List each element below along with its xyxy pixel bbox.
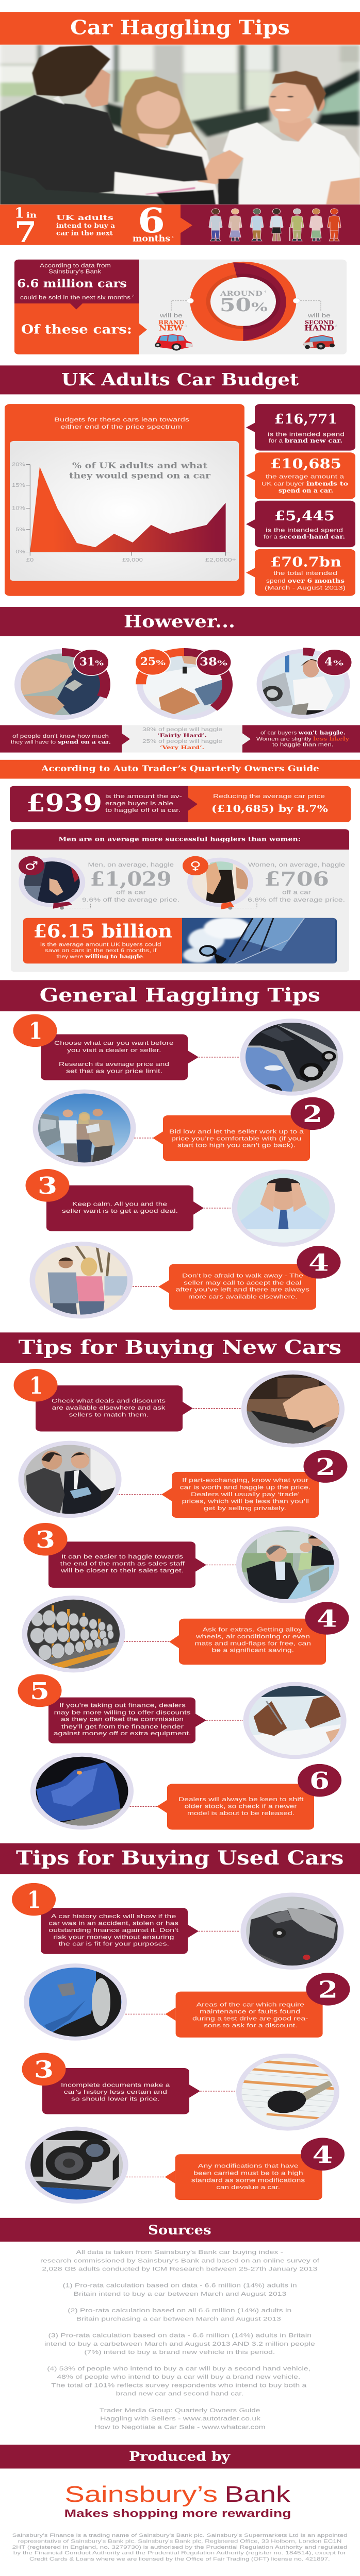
heading: However bbox=[0, 607, 360, 636]
new car tip 3: It can be easier to haggle towards bbox=[61, 1553, 183, 1560]
used car tip 4 bbox=[25, 2127, 345, 2204]
photo: scratched blue car bbox=[24, 1963, 127, 2041]
photo: car key on documents bbox=[236, 2054, 339, 2131]
new car tip 4: 4 bbox=[317, 1605, 337, 1632]
area chart: percent of UK adults by spend: 0% bbox=[15, 550, 25, 555]
callout: 6.15 billion bbox=[23, 918, 337, 964]
new car tip 5: against money off or extra equipment. bbox=[54, 1730, 191, 1737]
stat box: average intended spend: spend on a car. bbox=[279, 488, 333, 494]
photo ring: credit card 31 percent: % bbox=[95, 659, 104, 667]
new car tip 5 bbox=[18, 1674, 347, 1759]
female photo ring and badge bbox=[187, 858, 253, 909]
caption row: of car buyers won't haggle. bbox=[260, 730, 346, 736]
photo: row of cars bbox=[240, 1019, 343, 1101]
panel: 939 pound haggle: to haggle off of a car. bbox=[105, 807, 181, 814]
caption row: ‘Fairly Hard’. bbox=[157, 732, 207, 738]
area chart: percent of UK adults by spend: £2,0000+ bbox=[205, 558, 236, 563]
photo ring: keys and handshake 25 and 38 percent: % bbox=[156, 658, 166, 667]
title band bbox=[0, 12, 360, 45]
new car tip 2: car is worth and haggle up the price. bbox=[180, 1484, 310, 1490]
text block: sources: The total of 101% reflects survey respondents who intend to buy both a bbox=[51, 2382, 307, 2388]
panel: men versus women: 9.6% off the average price. bbox=[82, 896, 179, 903]
new car tip 3: will be closer to their sales target. bbox=[60, 1567, 184, 1574]
heading: General Haggling Tips: General Haggling Tips bbox=[40, 984, 320, 1007]
general tip 1: Choose what car you want before bbox=[54, 1040, 174, 1046]
used car tip 3 bbox=[22, 2053, 339, 2131]
general tip 1 bbox=[13, 1014, 343, 1101]
new car tip 4: mats and mud-flaps for free, can bbox=[194, 1640, 311, 1647]
text block: sources: All data is taken from Sainsbury's Bank car buying index - bbox=[76, 2249, 283, 2256]
heading: Auto Trader guide: According to Auto Trader’s Quarterly Owners Guide bbox=[41, 765, 319, 773]
used car tip 3: 3 bbox=[34, 2056, 54, 2083]
area chart: percent of UK adults by spend: 15% bbox=[12, 483, 25, 488]
callout: 6.15 billion: £6.15 billion bbox=[33, 920, 172, 942]
used car tip 1 bbox=[12, 1883, 344, 1970]
general tip 2: start too high you can’t go back). bbox=[177, 1142, 296, 1148]
new car tip 4: Ask for extras. Getting alloy bbox=[203, 1626, 303, 1633]
new car tip 4: wheels, air conditioning or even bbox=[195, 1633, 310, 1639]
general tip 4 bbox=[30, 1242, 340, 1318]
panel: men versus women: £706 bbox=[264, 868, 329, 891]
stat box: second-hand car spend: is the intended spend bbox=[266, 527, 343, 533]
general tip 3: Keep calm. All you and the bbox=[72, 1200, 167, 1207]
panel: 6.6 million cars bbox=[14, 260, 347, 354]
icon: red modern mini bbox=[155, 334, 192, 351]
panel: 939 pound haggle: erage buyer is able bbox=[105, 800, 173, 807]
stat box: brand new car spend: £16,771 bbox=[274, 412, 337, 427]
panel: 939 pound haggle: £939 bbox=[26, 789, 102, 818]
heading: Produced by bbox=[0, 2445, 360, 2468]
callout: 6.15 billion: is the average amount UK buyers could bbox=[40, 941, 161, 947]
general tip 1: 1 bbox=[29, 1018, 42, 1045]
label: second hand: SECOND bbox=[305, 319, 334, 326]
caption row bbox=[0, 725, 360, 753]
text block: legal notice: by the Financial Conduct Authority and the Prudential Regulation Authority (register no. 184514), except for bbox=[13, 2551, 346, 2556]
stat strip: 1 in 7 UK adults bbox=[0, 201, 360, 249]
general tip 3 bbox=[26, 1169, 335, 1247]
logo: Sainsbury's Bank: Bank bbox=[224, 2482, 290, 2506]
heading: Auto Trader guide bbox=[0, 760, 360, 778]
used car tip 3: so should lower its price. bbox=[71, 2095, 159, 2102]
panel: men versus women: Men, on average, haggle bbox=[88, 861, 174, 868]
general tip 1: set that as your price limit. bbox=[66, 1067, 162, 1074]
label: brand new bbox=[158, 312, 187, 332]
general tip 2: 2 bbox=[303, 1101, 322, 1128]
photo: car under blue cover bbox=[30, 1753, 134, 1829]
new car tip 1 bbox=[13, 1369, 345, 1448]
panel: 939 pound haggle bbox=[10, 786, 351, 822]
heading: Tips for Buying Used Cars bbox=[0, 1843, 360, 1874]
used car tip 3: car’s history less certain and bbox=[64, 2089, 167, 2095]
callout: 6.15 billion: they were willing to haggle. bbox=[56, 953, 144, 959]
caption row: 25% of people will haggle bbox=[142, 738, 222, 744]
panel: 939 pound haggle: is the amount the av- bbox=[105, 793, 182, 799]
general tip 3: 3 bbox=[38, 1173, 57, 1199]
new car tip 4: be a significant saving. bbox=[211, 1647, 294, 1653]
new car tip 2 bbox=[19, 1441, 348, 1518]
new car tip 3 bbox=[24, 1523, 339, 1603]
panel: men versus women: Women, on average, haggle bbox=[248, 861, 345, 868]
photo: hands signing paperwork bbox=[243, 1682, 347, 1759]
text block: sources: (3) Pro-rata calculation based on data - 6.6 million (14%) adults in Britain bbox=[48, 2332, 312, 2338]
photo: two men at car engine bbox=[19, 1441, 122, 1518]
text block: sources bbox=[40, 2249, 320, 2430]
text block: legal notice: 2HT (registered in England, no. 3279730) is authorised by the Prudential Regulation Authority and regulated bbox=[12, 2545, 348, 2550]
new car tip 2: 2 bbox=[316, 1453, 335, 1481]
stat strip: 1 in 7 UK adults: car in the next bbox=[56, 230, 113, 237]
stat strip: 1 in 7 UK adults: 7 bbox=[14, 216, 37, 249]
heading: General Haggling Tips bbox=[0, 980, 360, 1011]
area chart: percent of UK adults by spend bbox=[12, 462, 236, 563]
used car tip 2: Areas of the car which require bbox=[197, 2001, 304, 2008]
heading: UK Adults Car Budget: UK Adults Car Budget bbox=[61, 370, 299, 390]
label: second hand: 3 bbox=[335, 325, 338, 328]
panel: 6.6 million cars: 2 bbox=[132, 295, 135, 298]
heading: Tips for Buying New Cars bbox=[0, 1332, 360, 1363]
panel: men versus women: ♂ bbox=[25, 859, 38, 873]
used car tip 1: the car is fit for your purposes. bbox=[59, 1941, 169, 1947]
stat box: brand new car spend bbox=[246, 404, 355, 451]
general tip 4: Don’t be afraid to walk away - The bbox=[182, 1272, 303, 1279]
label: second hand: HAND bbox=[304, 324, 334, 332]
new car tip 4 bbox=[22, 1596, 349, 1672]
heading: Sources: Sources bbox=[148, 2223, 211, 2238]
panel: men versus women bbox=[11, 829, 349, 972]
caption row: to haggle than men. bbox=[272, 741, 333, 748]
photo ring: keys and handshake 25 and 38 percent: % bbox=[217, 659, 227, 667]
stat strip: 1 in 7 UK adults: 6 bbox=[138, 201, 165, 241]
used car tip 2: 2 bbox=[318, 1976, 338, 2003]
panel: 6.6 million cars: According to data from bbox=[40, 262, 111, 268]
photo: couple with salesman outdoors bbox=[33, 1090, 136, 1166]
salesman bbox=[0, 95, 208, 205]
woman bbox=[121, 76, 207, 150]
donut chart: around 50 percent: AROUND bbox=[220, 289, 263, 297]
stat box: average intended spend: the average amount a bbox=[266, 473, 345, 480]
used car tip 2 bbox=[24, 1963, 350, 2041]
stat box: total spend: (March - August 2013) bbox=[265, 584, 346, 591]
caption row: Women are slightly less likely bbox=[256, 736, 350, 742]
text block: sources: Haggling with Sellers - www.autotrader.co.uk bbox=[100, 2415, 261, 2421]
heading: However: However... bbox=[124, 612, 235, 632]
photo ring: worried woman 4 percent: 4 bbox=[324, 655, 333, 669]
area chart: percent of UK adults by spend: 5% bbox=[15, 527, 25, 532]
photo: dealer with couple and blue car bbox=[236, 1526, 339, 1603]
new car tip 6: model is about to be released. bbox=[187, 1810, 294, 1816]
new car tip 2: prices, which will be less than you’ll bbox=[182, 1498, 309, 1504]
panel: budget chart: % of UK adults and what bbox=[72, 461, 207, 470]
general tip 2 bbox=[33, 1090, 334, 1166]
panel: budget chart: Budgets for these cars lean towards bbox=[54, 416, 189, 422]
stat box: total spend: spend over 6 months bbox=[266, 578, 345, 584]
photo ring: keys and handshake 25 and 38 percent: 25 bbox=[140, 655, 156, 668]
text block: sources: How to Negotiate a Car Sale - www.whatcar.com bbox=[94, 2424, 266, 2430]
panel: 6.6 million cars: 6.6 million cars bbox=[17, 277, 127, 291]
photo ring: worried woman 4 percent bbox=[257, 649, 353, 719]
panel: 6.6 million cars: Sainsbury's Bank bbox=[48, 268, 102, 275]
panel: men versus women: £1,029 bbox=[90, 868, 171, 891]
new car tip 5: may be more willing to offer discounts bbox=[54, 1709, 190, 1716]
label: second hand bbox=[304, 312, 338, 332]
panel: men versus women: off a car bbox=[282, 889, 312, 895]
logo: Sainsbury's Bank: Makes shopping more rewarding bbox=[64, 2507, 291, 2520]
new car tip 5: as they can offset the commission bbox=[61, 1716, 184, 1722]
new car tip 3: 3 bbox=[36, 1527, 55, 1553]
label: second hand: will be bbox=[307, 312, 331, 318]
used car tip 3: Incomplete documents make a bbox=[61, 2082, 170, 2088]
icon group: seven illustrated adults bbox=[209, 209, 341, 241]
donut chart: around 50 percent: % bbox=[251, 301, 268, 314]
general tip 1: you visit a dealer or seller. bbox=[67, 1047, 161, 1054]
used car tip 4: standard as some modifications bbox=[191, 2177, 305, 2183]
used car tip 1: risk your money without ensuring bbox=[53, 1934, 174, 1940]
panel: men versus women: 6.6% off the average price. bbox=[248, 896, 345, 903]
panel: 939 pound haggle: (£10,685) by 8.7% bbox=[211, 803, 328, 815]
logo: Sainsbury's Bank: Sainsbury’s bbox=[64, 2482, 218, 2506]
photo: stressed man bbox=[232, 1170, 335, 1247]
stat box: total spend: the total intended bbox=[273, 570, 337, 577]
general tip 4: 4 bbox=[308, 1249, 329, 1277]
male photo ring and badge bbox=[19, 857, 85, 909]
stat box: average intended spend: £10,685 bbox=[270, 456, 341, 472]
callout: 6.15 billion: save on cars in the next 6 months, if bbox=[45, 947, 157, 953]
new car tip 6 bbox=[30, 1753, 341, 1829]
text block: sources: brand new car and second hand car. bbox=[116, 2390, 243, 2397]
young man bbox=[278, 118, 315, 142]
text block: sources: Trader Media Group: Quarterly Owners Guide bbox=[100, 2407, 260, 2414]
new car tip 6: Dealers will always be keen to shift bbox=[178, 1796, 304, 1803]
general tip 4: after you’ve left and there are always bbox=[176, 1286, 309, 1293]
photo: wall of alloy wheels bbox=[22, 1596, 125, 1672]
general tip 2: Bid low and let the seller work up to a bbox=[169, 1128, 304, 1134]
photo ring: worried woman 4 percent: % bbox=[333, 659, 343, 667]
area chart: percent of UK adults by spend: 20% bbox=[12, 462, 25, 467]
stat box: total spend bbox=[246, 549, 355, 596]
photo ring: keys and handshake 25 and 38 percent bbox=[135, 649, 232, 720]
panel: 6.6 million cars: Of these cars: bbox=[21, 321, 132, 336]
text block: sources: research commissioned by Sainsbury's Bank and based on an online survey of bbox=[40, 2257, 320, 2264]
stat box: second-hand car spend: for a second-hand car. bbox=[264, 534, 345, 540]
text block: sources: (4) 53% of people who intend to buy a car will buy a second hand vehicle, bbox=[47, 2365, 310, 2372]
photo: crashed car bbox=[240, 1892, 343, 1970]
photo ring: credit card 31 percent: 31 bbox=[79, 655, 95, 669]
label: brand new: NEW bbox=[159, 324, 184, 332]
stat strip: 1 in 7 UK adults: intend to buy a bbox=[56, 223, 115, 229]
stat box: average intended spend: UK car buyer intends to bbox=[261, 480, 349, 487]
caption row: 38% of people will haggle bbox=[142, 726, 222, 733]
new car tip 1: are available elsewhere and ask bbox=[52, 1404, 166, 1411]
photo: car reflecting sky bbox=[182, 918, 337, 964]
text block: sources: 2,028 GB adults conducted by ICM Research between 25-27th January 2013 bbox=[42, 2265, 317, 2272]
photo: custom speakers in car boot bbox=[25, 2127, 128, 2204]
new car tip 3: the end of the month as sales staff bbox=[60, 1560, 185, 1567]
new car tip 6: older stock, so check if a newer bbox=[185, 1803, 297, 1809]
text block: legal notice: Sainsbury's Finance is a trading name of Sainsbury's Bank plc. Sainsbury's Supermarkets Ltd is an appointed bbox=[12, 2533, 348, 2538]
general tip 4: seller may call to accept the deal bbox=[184, 1279, 301, 1286]
stat box: second-hand car spend: £5,445 bbox=[274, 508, 335, 524]
photo ring: credit card 31 percent bbox=[14, 649, 109, 720]
used car tip 1: outstanding finance against it. Don’t bbox=[48, 1927, 179, 1934]
photo ring: keys and handshake 25 and 38 percent: 38 bbox=[200, 655, 217, 669]
heading: Sources bbox=[0, 2218, 360, 2242]
new car tip 6: 6 bbox=[309, 1768, 330, 1794]
panel: budget chart bbox=[5, 404, 244, 596]
label: brand new: BRAND bbox=[158, 319, 184, 326]
hero photo: salesman shaking hands with a couple bbox=[0, 45, 360, 205]
photo: couple walking away bbox=[30, 1242, 133, 1318]
used car tip 2: sons to ask for a discount. bbox=[204, 2022, 297, 2028]
new car tip 5: they’ll get from the finance lender bbox=[61, 1723, 184, 1730]
stat strip: 1 in 7 UK adults: UK adults bbox=[56, 213, 113, 222]
caption row: they will have to spend on a car. bbox=[11, 739, 111, 745]
stat strip: 1 in 7 UK adults: in bbox=[26, 211, 37, 220]
heading: UK Adults Car Budget bbox=[0, 365, 360, 394]
used car tip 1: 1 bbox=[27, 1887, 41, 1913]
general tip 3: seller want is to get a good deal. bbox=[62, 1208, 178, 1214]
text block: sources: (7%) intend to buy a brand new vehicle in this period. bbox=[84, 2349, 275, 2355]
heading: Produced by: Produced by bbox=[129, 2449, 231, 2464]
icon: red classic mini bbox=[303, 335, 335, 349]
donut chart: around 50 percent bbox=[171, 262, 321, 341]
text block: sources: (1) Pro-rata calculation based on data - 6.6 million (14%) adults in bbox=[63, 2282, 297, 2289]
area chart: percent of UK adults by spend: 10% bbox=[12, 506, 25, 511]
area chart: percent of UK adults by spend: £0 bbox=[26, 558, 34, 563]
text block: legal notice: Credit Cards & Loans where we are licensed by the Office of Fair Trading (OFT) license no. 421897. bbox=[29, 2556, 330, 2562]
text block: sources: Britain purchasing a car between March and August 2013 bbox=[76, 2315, 281, 2322]
panel: men versus women: Men are on average more successful hagglers than women: bbox=[59, 836, 301, 843]
stat strip: 1 in 7 UK adults: months bbox=[133, 233, 170, 244]
general tip 1: Research its average price and bbox=[59, 1061, 169, 1067]
stat box: average intended spend bbox=[246, 452, 355, 499]
new car tip 2: If part-exchanging, know what your bbox=[182, 1477, 309, 1483]
donut chart: around 50 percent: 50 bbox=[220, 294, 251, 315]
new car tip 2: get by selling privately. bbox=[204, 1505, 286, 1511]
text block: sources: (2) Pro-rata calculation based on all 6.6 million (14%) adults in bbox=[68, 2307, 291, 2314]
caption row: ‘Very Hard’. bbox=[160, 744, 204, 750]
stat box: second-hand car spend bbox=[246, 501, 355, 547]
text block: sources: 48% of people who intend to buy a car will buy a brand new vehicle. bbox=[57, 2374, 300, 2380]
used car tip 1: A car history check will show if the bbox=[51, 1913, 176, 1920]
panel: 939 pound haggle: Reducing the average car price bbox=[213, 793, 325, 799]
stat box: brand new car spend: for a brand new car. bbox=[269, 437, 342, 444]
donut chart: around 50 percent: 4 bbox=[264, 291, 267, 294]
used car tip 1: car was in an accident, stolen or has bbox=[48, 1920, 178, 1926]
label: brand new: 3 bbox=[185, 325, 187, 328]
panel: 6.6 million cars: could be sold in the next six months bbox=[20, 294, 130, 300]
label: brand new: will be bbox=[159, 312, 183, 318]
photo: hands typing on laptop bbox=[241, 1370, 345, 1448]
caption row: of people don't know how much bbox=[12, 733, 109, 739]
logo: Sainsbury's Bank bbox=[64, 2482, 291, 2520]
new car tip 1: sellers to match them. bbox=[69, 1412, 149, 1418]
area chart: percent of UK adults by spend: £9,000 bbox=[122, 558, 143, 563]
new car tip 5: 5 bbox=[30, 1677, 50, 1705]
stat box: brand new car spend: is the intended spend bbox=[268, 431, 345, 437]
used car tip 4: Any modifications that have bbox=[198, 2162, 299, 2169]
general tip 4: more cars available elsewhere. bbox=[188, 1293, 297, 1300]
used car tip 4: can devalue a car. bbox=[216, 2184, 280, 2190]
text block: sources: Britain intend to buy a car between March and August 2013 bbox=[73, 2291, 286, 2297]
used car tip 4: 4 bbox=[312, 2141, 333, 2168]
title band: Car Haggling Tips bbox=[70, 16, 290, 39]
panel: budget chart: they would spend on a car bbox=[69, 471, 210, 481]
panel: men versus women: off a car bbox=[116, 889, 146, 895]
used car tip 4: been carried must be to a high bbox=[193, 2170, 303, 2176]
stat box: total spend: £70.7bn bbox=[270, 554, 341, 570]
stat strip: 1 in 7 UK adults: 1 bbox=[172, 236, 174, 239]
new car tip 1: Check what deals and discounts bbox=[52, 1397, 166, 1404]
new car tip 5: If you’re taking out finance, dealers bbox=[59, 1702, 186, 1708]
new car tip 2: Dealers will usually pay ‘trade’ bbox=[191, 1491, 300, 1498]
general tip 2: price you’re comfortable with (if you bbox=[171, 1135, 301, 1142]
used car tip 2: maintenance or faults found bbox=[200, 2008, 300, 2014]
stat strip: 1 in 7 UK adults: 1 bbox=[14, 205, 24, 221]
text block: legal notice bbox=[12, 2533, 348, 2562]
panel: men versus women: ♀ bbox=[190, 859, 201, 873]
text block: legal notice: representative of Sainsbury's Bank plc. Sainsbury's Bank plc, Registered Office, 33 Holborn, London EC1N bbox=[18, 2539, 341, 2544]
new car tip 1: 1 bbox=[29, 1372, 43, 1399]
used car tip 2: during a test drive are good rea- bbox=[192, 2015, 308, 2022]
panel: budget chart: either end of the price spectrum bbox=[60, 423, 183, 430]
text block: sources: intend to buy a carbetween March and August 2013 AND 3.2 million people bbox=[44, 2341, 315, 2347]
